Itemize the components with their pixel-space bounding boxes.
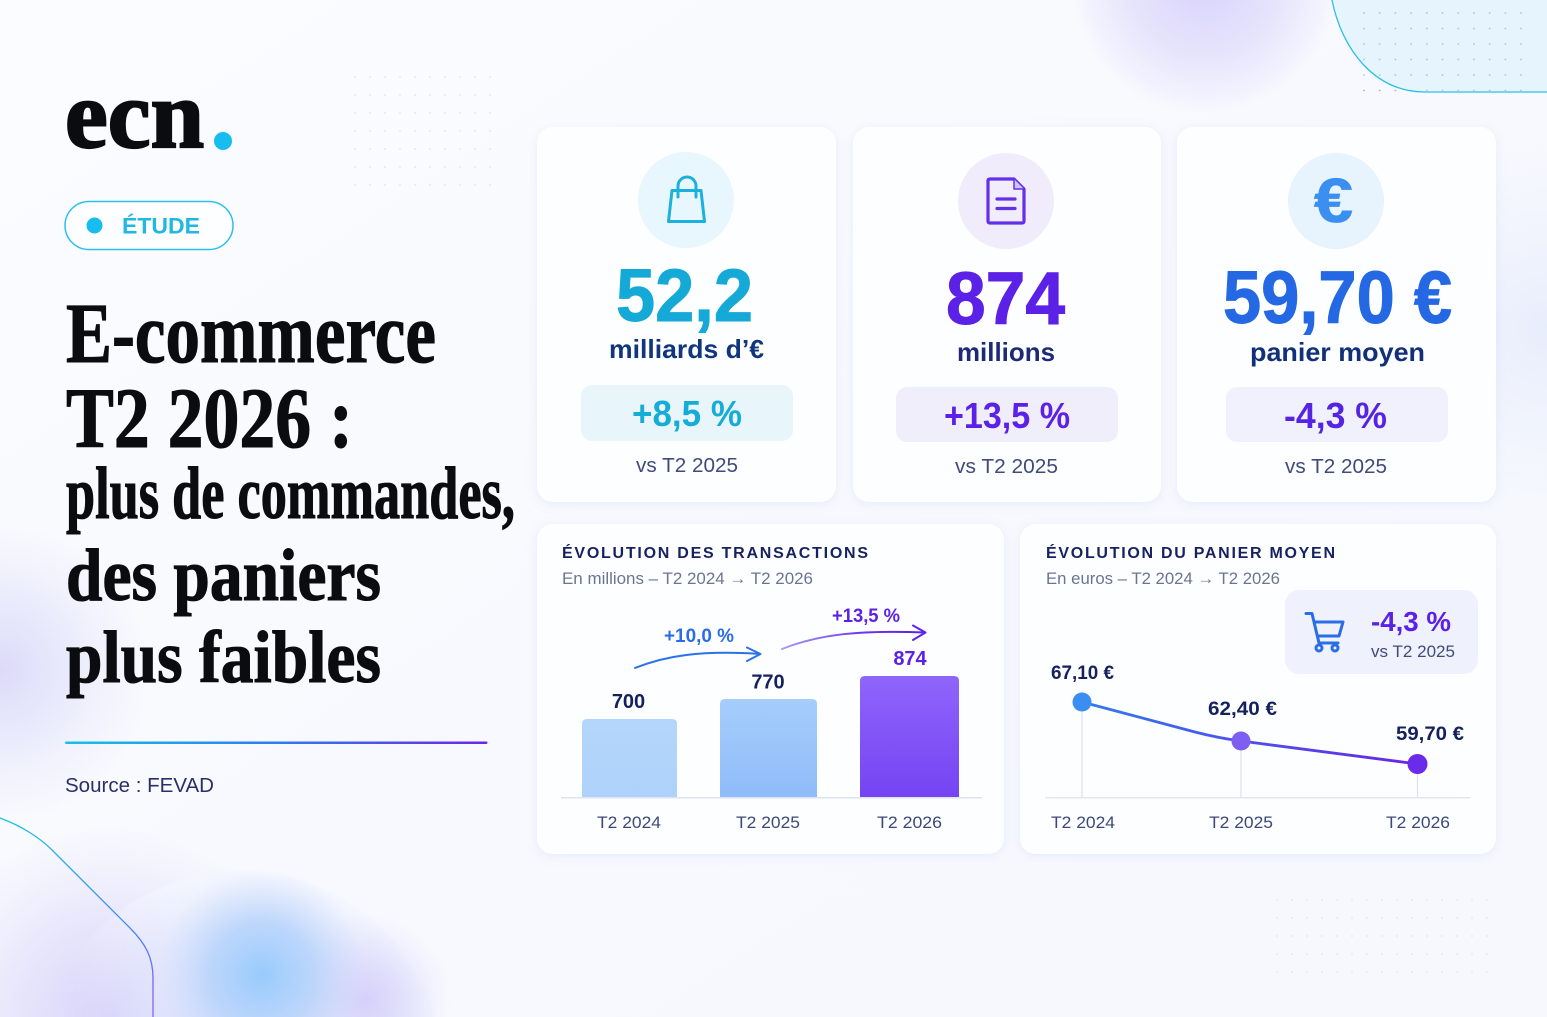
unit: milliards d’€	[609, 334, 764, 364]
source: Source : FEVAD	[65, 775, 214, 797]
value: 59,70 €: 59,70 €	[1223, 256, 1452, 339]
line chart: T2 2024	[1051, 813, 1115, 832]
line chart	[1045, 663, 1470, 832]
comparison: vs T2 2025	[636, 455, 738, 477]
line chart: 62,40 €	[1208, 699, 1277, 720]
panel: panier moyen	[1177, 127, 1496, 502]
unit: millions	[957, 337, 1055, 367]
bar chart	[561, 648, 982, 832]
change pill	[896, 387, 1118, 442]
chart subtitle: En millions – T2 2024 → T2 2026	[562, 569, 813, 588]
icon: euro: €	[1314, 167, 1353, 236]
bar chart: T2 2026	[877, 813, 942, 832]
comparison: vs T2 2025	[1285, 456, 1387, 478]
logo: ecn: ecn	[65, 61, 204, 168]
value: 874: 874	[946, 257, 1065, 340]
title: des paniers	[66, 535, 381, 617]
icon: shopping bag	[668, 177, 704, 222]
panel: évolution des transactions	[537, 524, 1004, 854]
change pill	[1226, 387, 1448, 442]
title: plus de commandes,	[66, 453, 515, 535]
arrow: +10,0 %: +10,0 %	[664, 626, 734, 647]
bar chart: T2 2025	[736, 813, 800, 832]
bar chart: 700	[612, 691, 645, 713]
change pill	[581, 385, 793, 441]
comparison: vs T2 2025	[955, 456, 1058, 478]
title: T2 2026 :	[66, 370, 353, 466]
arrow: +13,5 %	[782, 606, 926, 649]
chart heading: ÉVOLUTION DU PANIER MOYEN	[1046, 543, 1335, 562]
callout: vs T2 2025	[1371, 642, 1455, 661]
icon: document	[988, 179, 1024, 223]
line chart: T2 2026	[1386, 813, 1450, 832]
divider	[65, 742, 488, 744]
bar chart: T2 2024	[597, 813, 661, 832]
bar chart: 874	[893, 648, 928, 670]
callout: -4,3 %	[1371, 606, 1451, 637]
icon: cart	[1306, 614, 1343, 651]
chart heading: ÉVOLUTION DES TRANSACTIONS	[562, 543, 868, 562]
arrow: +10,0 %	[635, 626, 760, 668]
value: 52,2: 52,2	[616, 254, 753, 337]
line chart: 67,10 €	[1051, 663, 1114, 684]
badge: étude: ÉTUDE	[122, 214, 200, 238]
line chart: 59,70 €	[1396, 724, 1464, 745]
title: plus faibles	[66, 617, 381, 699]
arrow: +13,5 %: +13,5 %	[832, 606, 900, 627]
unit: panier moyen	[1250, 337, 1425, 367]
callout	[1285, 590, 1478, 674]
line chart: T2 2025	[1209, 813, 1273, 832]
change pill: +8,5 %	[632, 393, 742, 434]
title: E-commerce	[66, 285, 436, 381]
badge: étude	[65, 202, 233, 250]
change pill: +13,5 %	[944, 395, 1070, 436]
bar chart: 770	[751, 672, 785, 694]
panel: chiffre d'affaires	[537, 127, 836, 502]
panel: évolution du panier moyen	[1020, 524, 1496, 854]
title	[66, 285, 515, 699]
panel: transactions	[853, 127, 1161, 502]
change pill: -4,3 %	[1284, 395, 1387, 436]
chart subtitle: En euros – T2 2024 → T2 2026	[1046, 569, 1280, 588]
